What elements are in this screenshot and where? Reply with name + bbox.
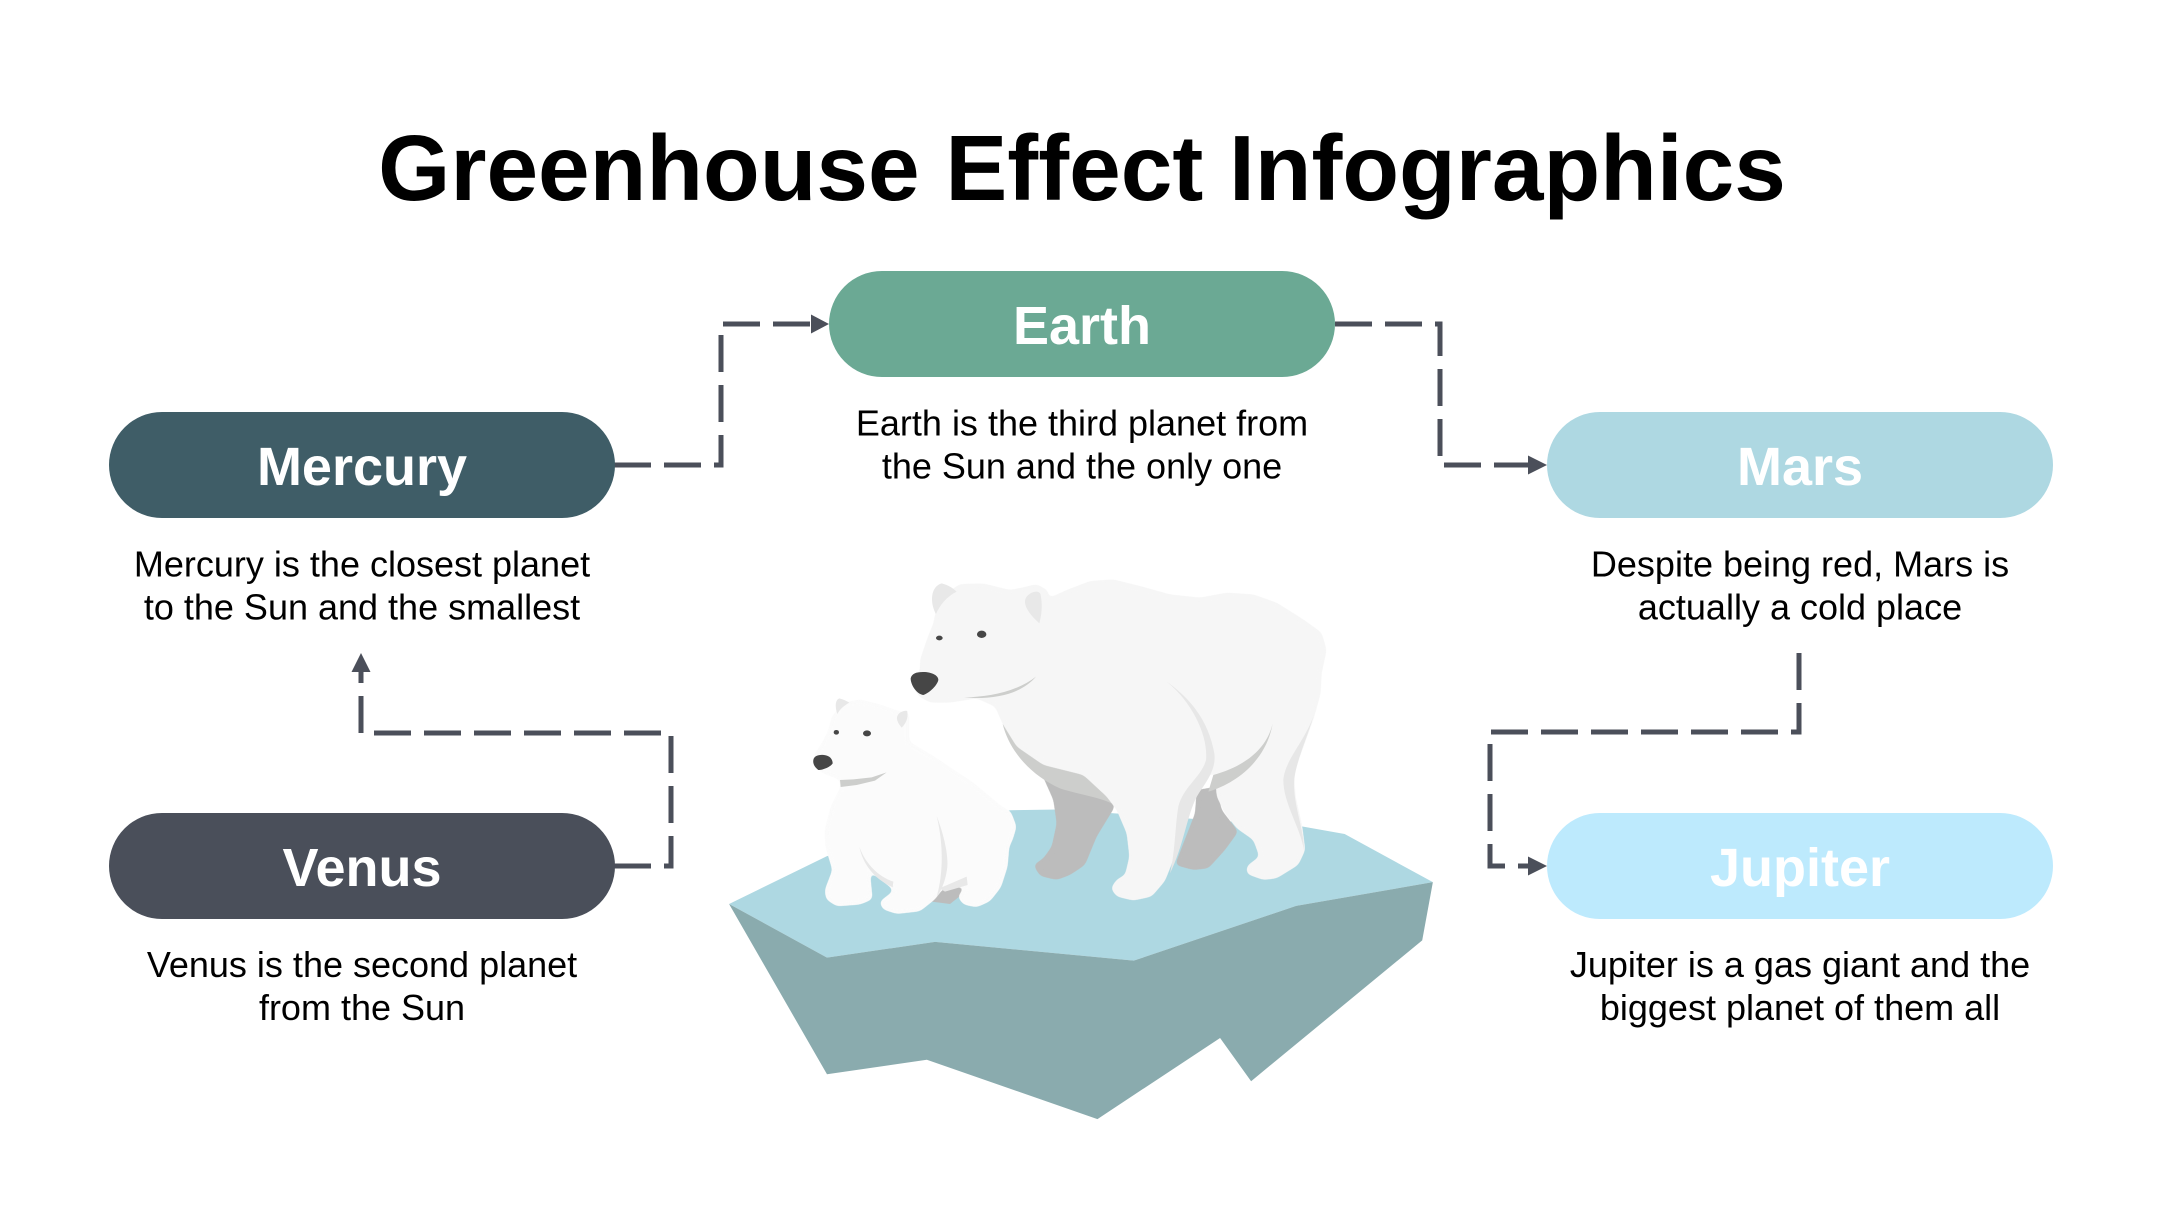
pill: Mars: Mars: [1737, 437, 1863, 497]
text: Jupiter description: Jupiter is a gas giant and the: [1570, 944, 2030, 985]
panel: Mercury: [109, 412, 615, 628]
icon: adult polar bear: [911, 579, 1327, 901]
arrow: Earth to Mars: [1335, 324, 1547, 474]
arrow: Venus to Mercury: [352, 653, 671, 866]
text: Earth description: the Sun and the only one: [882, 446, 1282, 486]
arrow: Mars to Jupiter: [1490, 653, 1799, 876]
pill: Jupiter: Jupiter: [1710, 838, 1890, 898]
text: Mars description: Despite being red, Mars is: [1591, 544, 2009, 584]
pill: Earth: [829, 271, 1335, 377]
pill: Mars: [1547, 412, 2053, 518]
panel: Mars: [1547, 412, 2053, 628]
pill: Jupiter: [1547, 813, 2053, 919]
icon: polar bear cub: [812, 698, 1017, 914]
title: Greenhouse Effect Infographics: [378, 116, 1786, 220]
panel: Earth: [829, 271, 1335, 486]
illustration: polar bears on iceberg: [729, 579, 1433, 1119]
iceberg: [729, 809, 1433, 1119]
pill: Earth: Earth: [1013, 296, 1151, 356]
text: Earth description: Earth is the third planet from: [856, 402, 1308, 444]
text: Venus description: from the Sun: [259, 987, 465, 1028]
pill: Mercury: [109, 412, 615, 518]
text: Mars description: actually a cold place: [1638, 586, 1962, 628]
arrow: Mercury to Earth: [614, 314, 829, 465]
pill: Venus: [109, 813, 615, 919]
text: Mercury description: to the Sun and the smallest: [144, 586, 580, 628]
text: Mercury description: Mercury is the closest planet: [134, 544, 590, 584]
pill: Venus: Venus: [282, 838, 442, 898]
panel: Jupiter: [1547, 813, 2053, 1028]
panel: Venus: [109, 813, 615, 1028]
pill: Mercury: Mercury: [257, 437, 467, 497]
text: Jupiter description: biggest planet of them all: [1600, 987, 2000, 1028]
text: Venus description: Venus is the second planet: [147, 944, 577, 985]
